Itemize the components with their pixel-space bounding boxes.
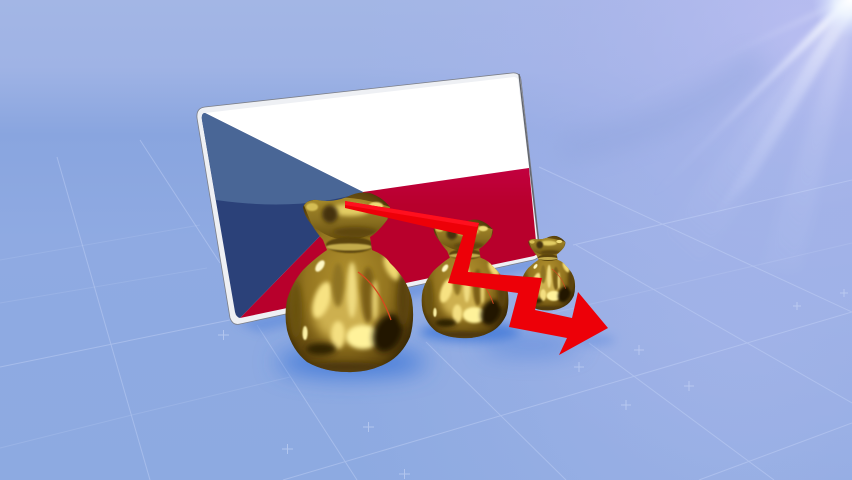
flag frame — [197, 73, 540, 324]
bag shadows — [277, 322, 615, 376]
small money bag — [521, 236, 575, 310]
blue triangle — [202, 113, 363, 318]
flag panel: Czech flag — [197, 73, 540, 324]
large money bag — [286, 192, 413, 372]
floor plus marks — [218, 289, 848, 479]
white stripe — [205, 77, 529, 192]
flag right edge shading — [519, 74, 540, 254]
red stripe — [240, 168, 537, 318]
medium money bag — [422, 220, 508, 338]
light rays from top right — [560, 0, 852, 370]
blue gloss — [202, 113, 363, 204]
flag panel shadow — [236, 258, 545, 332]
floor grid lines — [0, 140, 852, 480]
red falling arrow — [345, 201, 608, 355]
